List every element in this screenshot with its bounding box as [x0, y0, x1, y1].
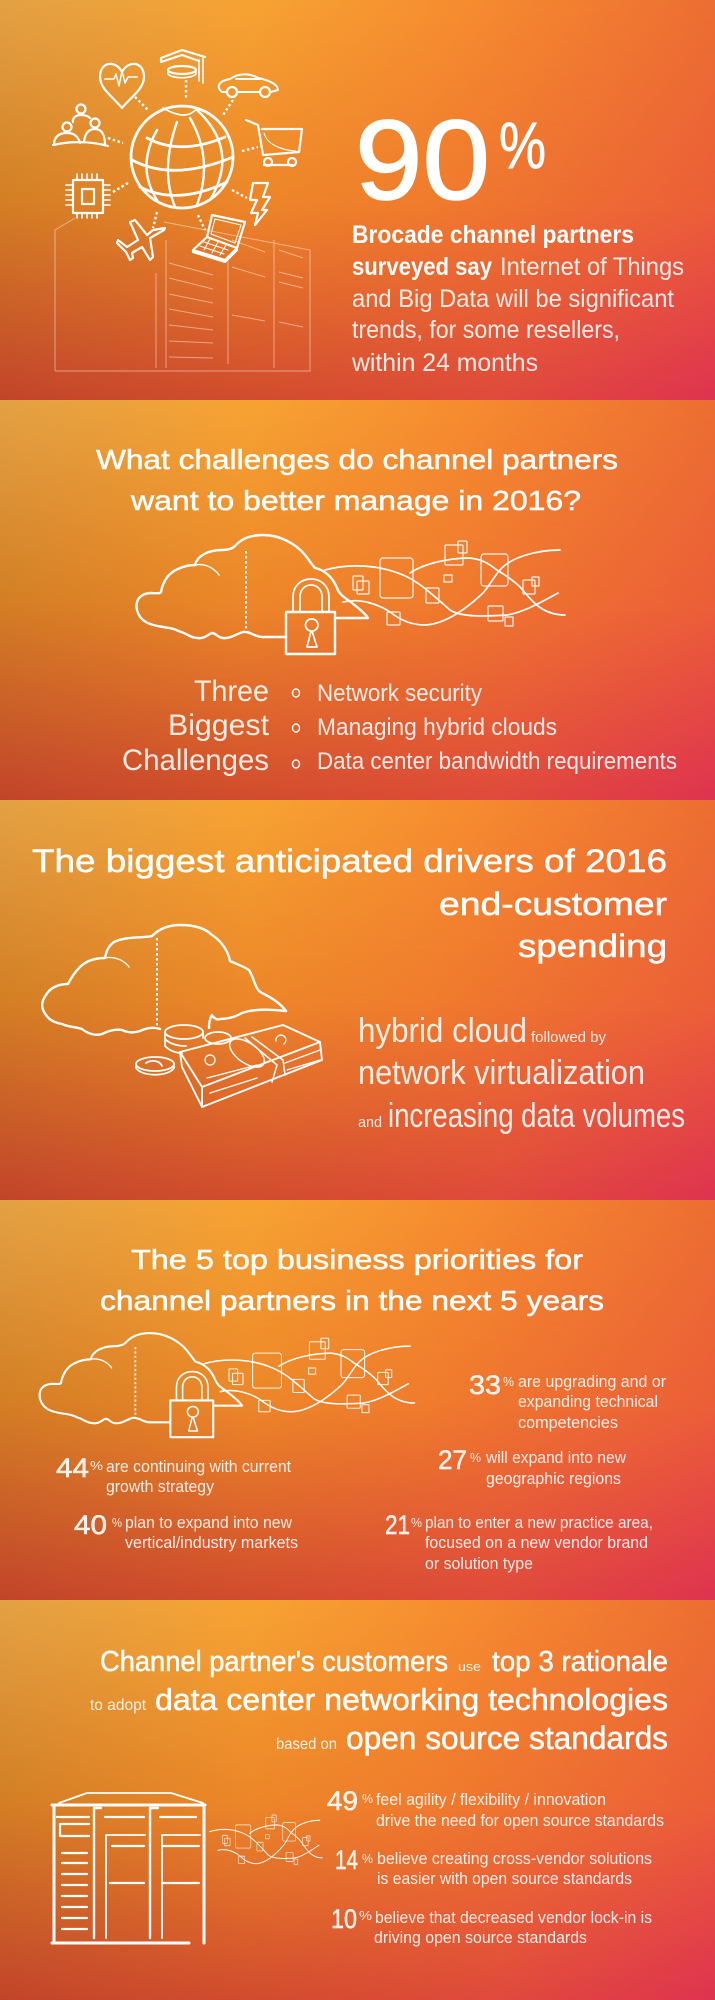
- stat: 10%: %: [359, 1908, 372, 1923]
- list: challenges: Network security: [317, 680, 482, 707]
- heading: [100, 1244, 604, 1316]
- icon: microchip: [66, 174, 110, 218]
- heading: [90, 1646, 668, 1756]
- stat: 33%: %: [503, 1374, 514, 1389]
- text block: survey finding: within 24 months: [351, 349, 538, 377]
- icon: graduation cap: [161, 50, 205, 83]
- label: three biggest challenges: [122, 675, 270, 777]
- icon: airplane: [117, 220, 165, 260]
- text block: survey finding: Brocade channel partners: [352, 221, 634, 249]
- icon: cloud with padlock and data waves: [40, 1333, 414, 1437]
- connector dashes: [108, 80, 258, 230]
- list: challenges: Data center bandwidth requirements: [317, 748, 677, 775]
- stat: 49%: feel agility / flexibility / innovation: [376, 1790, 606, 1809]
- stat: 33%: are upgrading and or: [518, 1372, 666, 1391]
- text block: survey finding: [351, 221, 684, 377]
- stat: 14%: believe creating cross-vendor solutions: [377, 1849, 652, 1868]
- panel: spending drivers: [0, 800, 715, 1200]
- text block: drivers: followed by: [531, 1029, 606, 1046]
- label: three biggest challenges: Biggest: [168, 709, 270, 742]
- panel: challenges: [0, 400, 715, 800]
- heading: top 3 rationale: [492, 1646, 668, 1678]
- stat: 14%: 14: [335, 1845, 358, 1875]
- icon: cloud with padlock and data waves: [137, 535, 565, 654]
- stat: 21%: or solution type: [425, 1554, 533, 1573]
- label: three biggest challenges: Challenges: [122, 744, 269, 777]
- stat: 40%: plan to expand into new: [125, 1513, 293, 1532]
- stat: 49%: [327, 1786, 664, 1830]
- stat: 44%: growth strategy: [106, 1477, 214, 1496]
- heading: The 5 top business priorities for: [131, 1244, 583, 1275]
- text block: drivers: [358, 1012, 685, 1135]
- big number: 90%: [355, 97, 546, 223]
- stat: 40%: vertical/industry markets: [125, 1533, 298, 1552]
- stat: 27%: will expand into new: [485, 1448, 627, 1467]
- stat: 27%: 27: [438, 1445, 467, 1475]
- text block: survey finding: Internet of Things: [500, 253, 684, 281]
- heading: [32, 843, 667, 964]
- heading: What challenges do channel partners: [96, 444, 618, 475]
- panel: business priorities: [0, 1200, 715, 1600]
- icon: stack of banknotes: [180, 1025, 322, 1107]
- stat: 49%: %: [362, 1791, 373, 1806]
- heading: channel partners in the next 5 years: [100, 1285, 604, 1316]
- panel: 90 percent internet of things: [0, 0, 715, 400]
- heading: The biggest anticipated drivers of 2016: [32, 843, 667, 879]
- heading: spending: [518, 928, 667, 964]
- heading: Channel partner's customers: [100, 1646, 448, 1678]
- stat: 21%: [385, 1510, 653, 1573]
- stat: 10%: 10: [331, 1904, 357, 1934]
- stat: 33%: 33: [469, 1370, 501, 1400]
- stat: 14%: [335, 1845, 652, 1888]
- heading: data center networking technologies: [155, 1682, 668, 1717]
- icon: heart with pulse: [100, 64, 144, 108]
- stat: 33%: [469, 1370, 666, 1432]
- stat: 21%: focused on a new vendor brand: [425, 1533, 648, 1552]
- stat: 10%: believe that decreased vendor lock-in is: [375, 1908, 652, 1927]
- stat: 27%: %: [470, 1450, 481, 1465]
- stat: 10%: driving open source standards: [374, 1928, 587, 1947]
- text block: survey finding: trends, for some resellers,: [352, 316, 620, 344]
- text block: survey finding: and Big Data will be significant: [352, 285, 674, 313]
- stat: 21%: 21: [385, 1510, 410, 1540]
- big number: 90%: 90: [355, 97, 490, 223]
- icon: group of people: [53, 104, 108, 146]
- heading: open source standards: [346, 1720, 668, 1756]
- stat: 21%: plan to enter a new practice area,: [425, 1513, 653, 1532]
- text block: drivers: hybrid cloud: [358, 1012, 527, 1050]
- icon: globe: [131, 106, 233, 208]
- heading: use: [458, 1659, 481, 1674]
- text block: drivers: and: [358, 1114, 382, 1131]
- stat: 49%: drive the need for open source standards: [376, 1811, 664, 1830]
- heading: to adopt: [90, 1697, 147, 1714]
- label: three biggest challenges: Three: [194, 675, 269, 708]
- heading: based on: [276, 1736, 337, 1753]
- icon: laptop: [193, 215, 245, 262]
- heading: [96, 444, 618, 516]
- stat: 44%: %: [90, 1458, 103, 1473]
- stat: 33%: expanding technical: [518, 1392, 658, 1411]
- stat: 49%: 49: [327, 1786, 358, 1816]
- stat: 40%: [74, 1510, 298, 1552]
- icon: coins: [136, 1025, 231, 1075]
- stat: 27%: [438, 1445, 627, 1488]
- stat: 44%: are continuing with current: [106, 1457, 291, 1476]
- stat: 21%: %: [411, 1515, 422, 1530]
- list: challenges: [292, 680, 677, 775]
- stat: 44%: [56, 1453, 291, 1496]
- icon: car: [219, 74, 278, 97]
- stat: 40%: %: [112, 1515, 122, 1530]
- icon: server rack: [52, 1793, 205, 1943]
- text block: drivers: network virtualization: [358, 1054, 645, 1092]
- stat: 33%: competencies: [518, 1413, 618, 1432]
- heading: want to better manage in 2016?: [130, 485, 581, 516]
- stat: 14%: %: [362, 1851, 373, 1866]
- big number: 90%: %: [499, 108, 546, 182]
- icon: shopping cart: [246, 120, 302, 166]
- panel: open source rationale: [0, 1600, 715, 2000]
- icon: faint data center building: [55, 218, 310, 371]
- stat: 10%: [331, 1904, 652, 1947]
- stat: 27%: geographic regions: [486, 1469, 621, 1488]
- stat: 44%: 44: [56, 1453, 89, 1483]
- stat: 40%: 40: [74, 1510, 107, 1540]
- stat: 14%: is easier with open source standards: [377, 1869, 632, 1888]
- icon: data waves: [209, 1815, 322, 1864]
- text block: survey finding: surveyed say: [352, 253, 492, 281]
- list: challenges: Managing hybrid clouds: [317, 714, 557, 741]
- icon: lightning bolt: [250, 183, 270, 225]
- heading: end-customer: [439, 886, 667, 922]
- icon: cloud: [42, 925, 286, 1035]
